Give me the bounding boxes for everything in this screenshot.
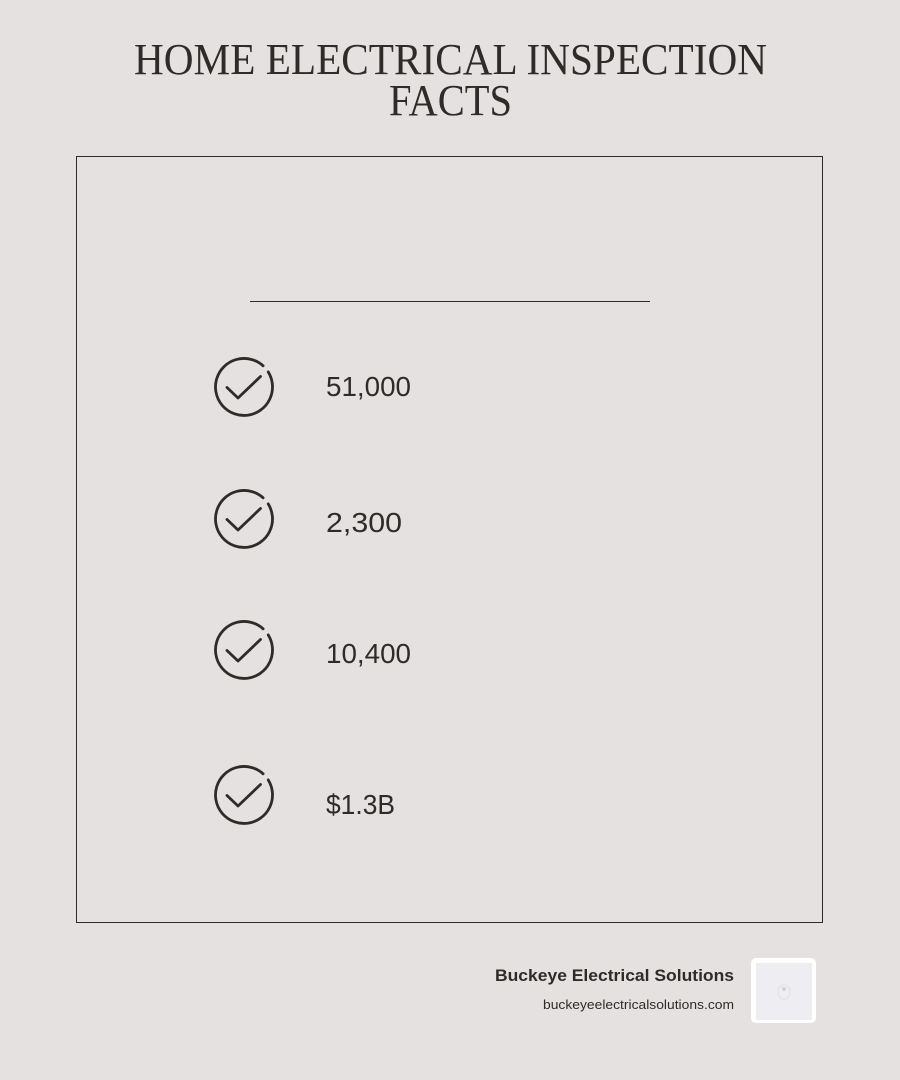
footer: website: buckeyeelectricalsolutions.com (543, 997, 734, 1012)
icon: check circle (215, 621, 272, 678)
fact: 2,300 (215, 490, 402, 547)
panel: facts frame (76, 156, 822, 922)
icon: company logo (751, 958, 816, 1023)
fact: $1.3B (215, 766, 395, 823)
icon: check circle (215, 766, 272, 823)
stat value: 51,000 (326, 371, 411, 402)
stat value: 10,400 (326, 638, 411, 669)
fact: 10,400 (215, 621, 411, 678)
stat value: $1.3B (326, 789, 395, 820)
stat value: 2,300 (326, 507, 402, 538)
icon: check circle (215, 490, 272, 547)
fact: 51,000 (215, 358, 411, 415)
title (134, 35, 767, 125)
footer: company name: Buckeye Electrical Solutions (495, 966, 734, 985)
icon: check circle (215, 358, 272, 415)
title: FACTS (389, 76, 512, 125)
title: HOME ELECTRICAL INSPECTION (134, 35, 767, 84)
